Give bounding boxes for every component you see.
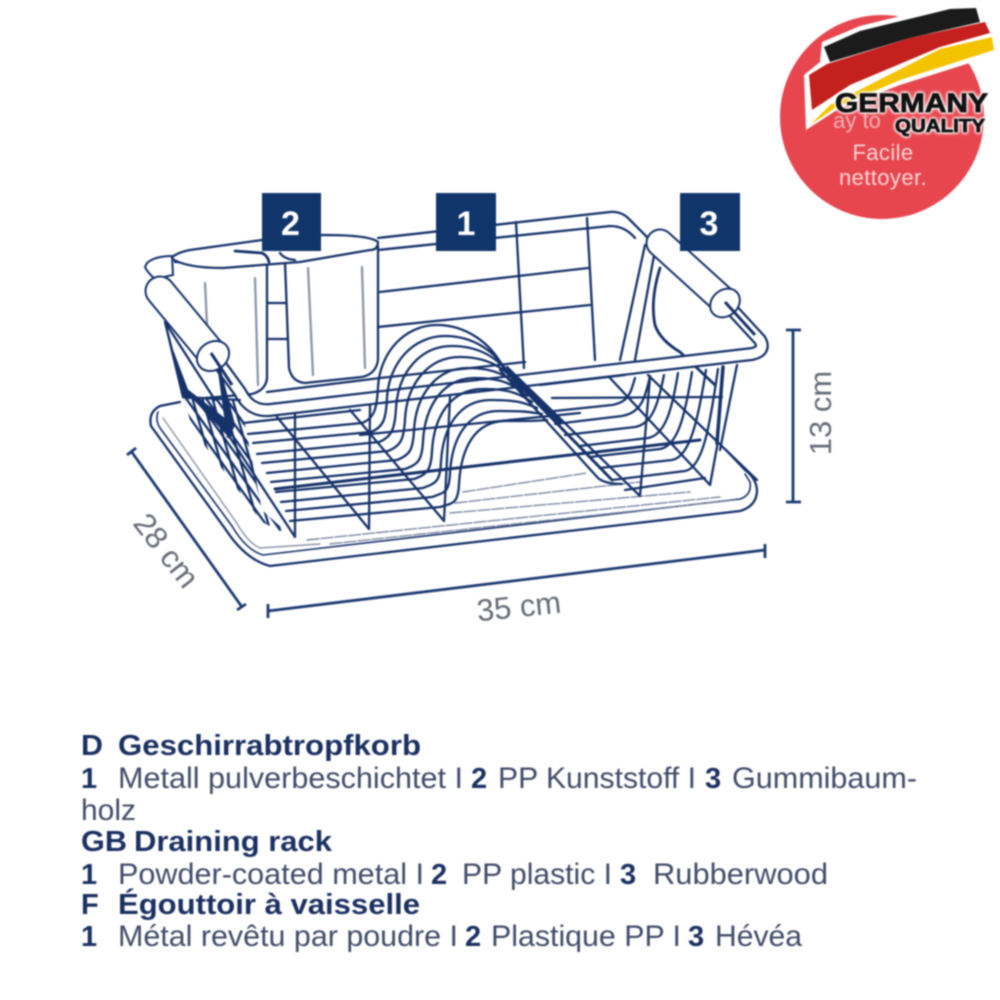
left end mesh	[162, 320, 282, 532]
text: German description: holz	[81, 794, 136, 827]
right wooden handle	[660, 243, 755, 335]
basket rim	[145, 256, 762, 410]
number tag 1	[436, 193, 496, 251]
dimension: depth 28 cm: 28 cm	[126, 506, 206, 595]
text: German description	[81, 730, 917, 827]
badge: Germany quality: QUALITY	[895, 116, 985, 136]
basket back wires	[267, 212, 715, 392]
badge: Germany quality: GERMANY	[835, 88, 988, 118]
badge: Germany quality: ay to	[833, 108, 881, 133]
text: English description: Rubberwood	[653, 858, 828, 891]
text: German description: 3	[705, 763, 721, 795]
dimension: depth 28 cm	[126, 448, 246, 610]
text: German description: PP Kunststoff I	[498, 762, 696, 795]
left utensil cup	[175, 262, 287, 398]
text: French description: Hévéa	[715, 920, 802, 953]
text: German description: 2	[471, 763, 487, 795]
text: English description: Draining rack	[134, 826, 333, 858]
illustration: dish rack	[120, 212, 762, 566]
text: German description: 1	[81, 763, 97, 795]
text: English description: GB	[81, 826, 127, 858]
text: French description: Égouttoir à vaisselle	[118, 887, 420, 921]
text: German description: Geschirrabtropfkorb	[118, 730, 421, 762]
number tag 3	[680, 193, 740, 251]
text: French description	[81, 887, 802, 953]
dimension: height 13 cm: 13 cm	[803, 371, 838, 455]
text: French description: 3	[688, 921, 704, 953]
cup rim oval	[171, 235, 378, 268]
text: English description: 2	[431, 859, 447, 891]
text: German description: Gummibaum-	[732, 762, 917, 795]
text: German description: D	[81, 730, 103, 762]
drip tray	[150, 402, 757, 566]
number tag 2	[262, 193, 321, 251]
text: English description	[81, 826, 828, 891]
text: French description: Plastique PP I	[491, 920, 681, 953]
text: English description: 1	[81, 859, 97, 891]
number tag 1: 1	[457, 205, 475, 243]
front wires and dividers	[225, 365, 757, 537]
plate arches	[248, 325, 547, 521]
text: French description: 1	[81, 921, 97, 953]
left wooden handle	[160, 291, 235, 385]
dimension: height 13 cm	[786, 330, 838, 502]
badge: Germany quality: Facile	[852, 140, 914, 165]
text: French description: 2	[465, 921, 481, 953]
text: French description: Métal revêtu par poudre I	[118, 920, 458, 953]
text: French description: F	[81, 889, 99, 921]
dimension: width 35 cm: 35 cm	[475, 585, 563, 628]
number tag 3: 3	[700, 205, 718, 243]
number tag 2: 2	[281, 205, 300, 243]
right utensil cup	[285, 246, 378, 383]
text: English description: PP plastic I	[462, 858, 612, 891]
badge: Germany quality	[780, 4, 998, 219]
text: German description: Metall pulverbeschichtet I	[118, 762, 463, 795]
text: English description: 3	[620, 859, 636, 891]
dimension: width 35 cm	[268, 544, 765, 628]
badge: Germany quality: nettoyer.	[839, 165, 927, 190]
text: English description: Powder-coated metal I	[118, 858, 424, 891]
